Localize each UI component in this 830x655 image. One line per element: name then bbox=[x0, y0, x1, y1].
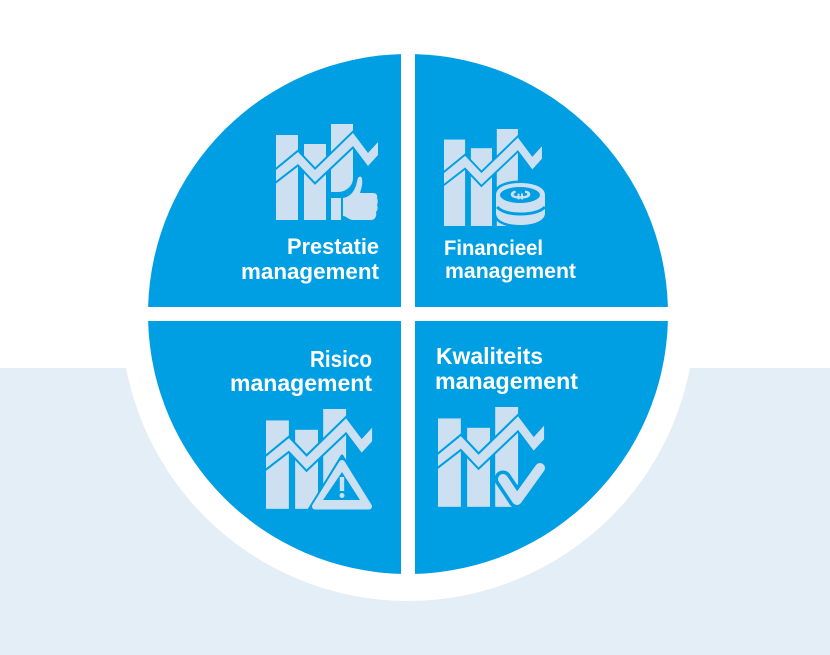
quadrant shape bbox=[148, 54, 401, 307]
icon: chart with thumbs up bbox=[276, 124, 378, 220]
panel: Kwaliteits management bbox=[415, 321, 668, 574]
icon: chart with euro coins bbox=[444, 129, 545, 226]
heading: Prestatie bbox=[287, 234, 379, 259]
quadrant shape bbox=[415, 54, 668, 307]
quadrant shape bbox=[148, 321, 401, 574]
heading line 2: management bbox=[241, 259, 380, 284]
panel: Prestatie management bbox=[148, 54, 401, 307]
heading line 2: management bbox=[230, 370, 372, 396]
heading: Risico bbox=[310, 346, 372, 372]
heading: Kwaliteits bbox=[436, 343, 543, 369]
icon: chart with check mark bbox=[438, 407, 544, 507]
icon: chart with euro coins: € bbox=[505, 190, 536, 200]
quadrant shape bbox=[415, 321, 668, 574]
white circle ring bbox=[121, 27, 695, 601]
icon: chart with warning triangle bbox=[266, 409, 377, 513]
background band bbox=[0, 368, 830, 655]
panel: Financieel management bbox=[415, 54, 668, 307]
panel: Risico management bbox=[148, 321, 401, 574]
heading: Financieel bbox=[444, 237, 543, 260]
heading line 2: management bbox=[435, 368, 578, 394]
heading line 2: management bbox=[445, 260, 576, 283]
